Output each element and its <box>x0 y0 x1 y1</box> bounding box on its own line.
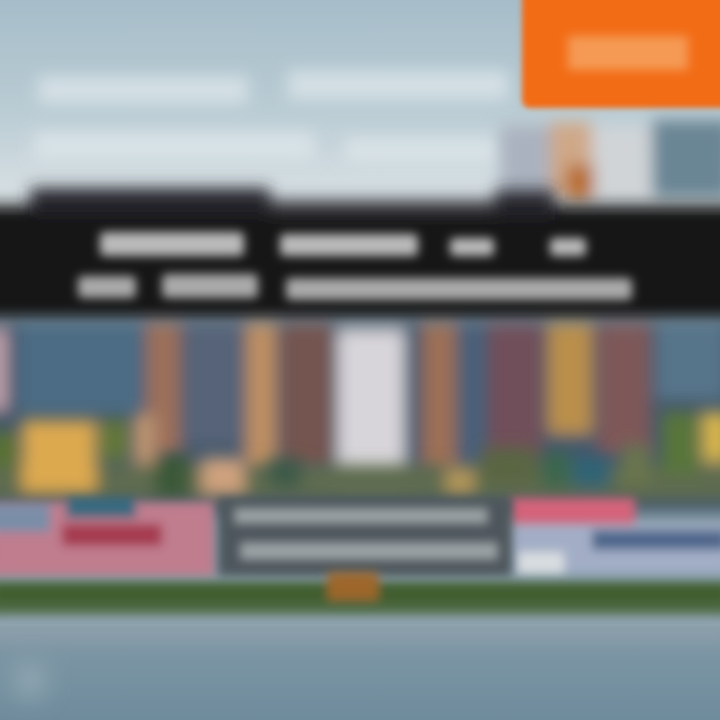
dark roof band <box>0 188 720 320</box>
central plaque <box>218 498 512 576</box>
heading line one <box>100 232 586 256</box>
heading text on band <box>78 232 632 300</box>
orange badge <box>522 0 720 108</box>
background: sky <box>0 0 720 215</box>
garden and planting <box>0 412 720 500</box>
colourful flower beds <box>0 498 720 576</box>
badge text <box>568 36 688 70</box>
heading line two <box>78 274 632 300</box>
green hedge <box>0 572 720 616</box>
colonnade <box>0 322 720 512</box>
plaque text <box>234 508 498 560</box>
sky headline text: Market Trends <box>38 74 241 107</box>
distant building <box>500 120 720 200</box>
water reflection <box>0 618 720 696</box>
badge text: Brand <box>568 39 649 70</box>
water <box>0 626 720 720</box>
sky headline text <box>34 70 508 162</box>
